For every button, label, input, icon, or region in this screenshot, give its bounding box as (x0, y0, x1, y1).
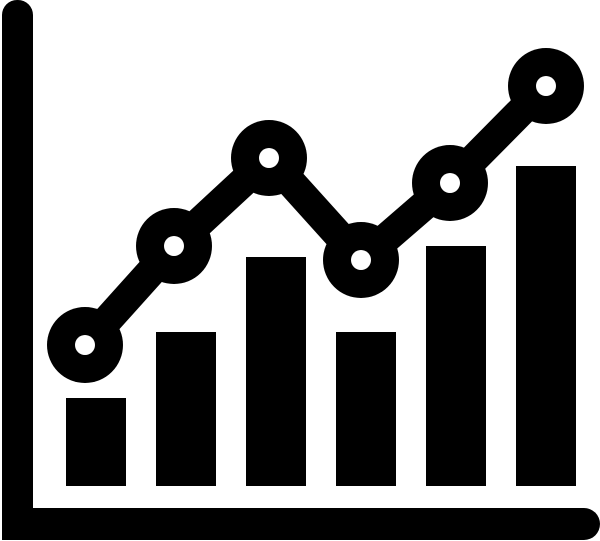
line chart (47, 48, 584, 383)
bars (66, 166, 576, 486)
